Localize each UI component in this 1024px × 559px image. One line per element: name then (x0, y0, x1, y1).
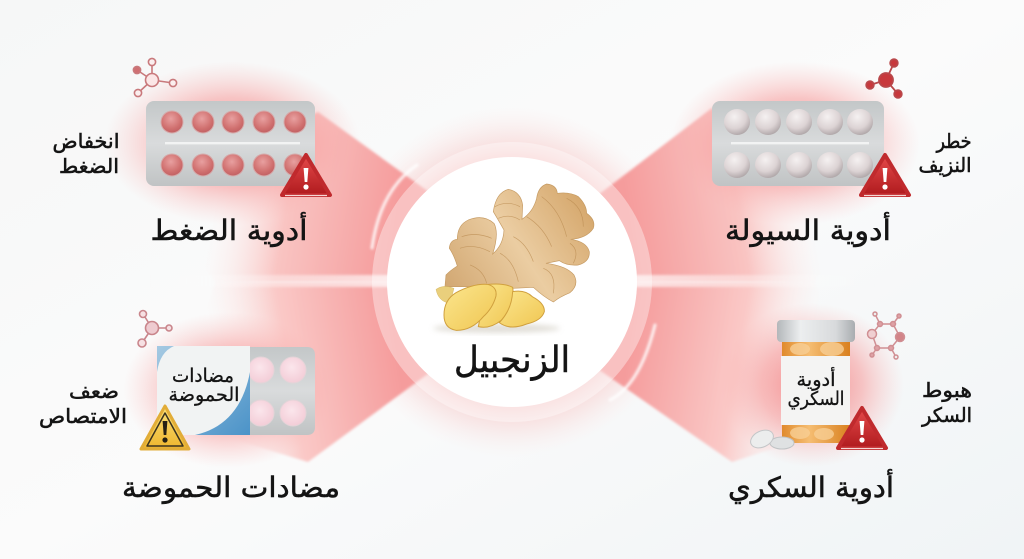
icon: ginger root (433, 184, 594, 333)
side effect: low pressure: الضغط (59, 154, 119, 178)
side effect: low pressure (52, 129, 120, 178)
icon: warning diabetes (838, 408, 886, 448)
icon: molecule diabetes (868, 312, 904, 359)
panel: blood pressure medicine (52, 58, 330, 247)
title: ginger: الزنجبيل (454, 340, 570, 381)
label: antacids: مضادات الحموضة (122, 471, 340, 504)
glow: top right (670, 61, 920, 225)
pill bottle: السكري (788, 388, 844, 410)
pill bottle (777, 320, 855, 443)
side effect: low pressure: انخفاض (52, 129, 120, 153)
blister pack pressure (146, 101, 315, 186)
center ring (372, 142, 652, 422)
white tablets (748, 427, 794, 451)
icon: molecule antacid (138, 310, 172, 347)
icon: warning pressure (282, 155, 330, 196)
label: blood pressure medicines: أدوية الضغط (150, 211, 308, 247)
side effect: low blood sugar (921, 378, 972, 427)
glow: bottom left (123, 312, 333, 468)
side effect: weak absorption (39, 379, 127, 428)
icon: yellow warning (141, 406, 189, 449)
panel: antacids (39, 310, 340, 504)
icon: warning thinner (861, 155, 909, 196)
light flare arcs (372, 165, 655, 400)
blister pack thinner (712, 101, 884, 186)
center circle (387, 157, 637, 407)
pill bottle: أدوية (796, 367, 836, 391)
beam: top left (150, 112, 512, 282)
panel: blood thinners (712, 59, 972, 247)
side effect: weak absorption: ضعف (69, 379, 119, 403)
blister pack antacid (245, 347, 315, 435)
label: diabetes medicines: أدوية السكري (728, 468, 894, 504)
medicine box antacid (157, 346, 250, 435)
beam: bottom right (512, 282, 860, 462)
center halo (337, 107, 687, 457)
side effect: weak absorption: الامتصاص (39, 404, 127, 428)
glow: top left (104, 61, 360, 225)
horizontal light band left (150, 275, 390, 287)
icon: molecule pressure (133, 58, 177, 97)
side effect: low blood sugar: هبوط (922, 378, 972, 402)
medicine box antacid: الحموضة (168, 384, 240, 406)
icon: molecule thinner (866, 59, 902, 98)
glow: bottom right (720, 303, 904, 467)
panel: diabetes medicines (728, 312, 972, 504)
horizontal light band right (635, 275, 875, 287)
beam: top right (512, 108, 880, 282)
side effect: low blood sugar: السكر (921, 403, 972, 427)
side effect: bleeding risk: خطر (936, 129, 972, 153)
side effect: bleeding risk: النزيف (918, 153, 972, 177)
label: blood thinners: أدوية السيولة (725, 211, 891, 247)
side effect: bleeding risk (918, 129, 972, 177)
medicine box antacid: مضادات (172, 365, 234, 387)
beam: bottom left (170, 282, 512, 462)
